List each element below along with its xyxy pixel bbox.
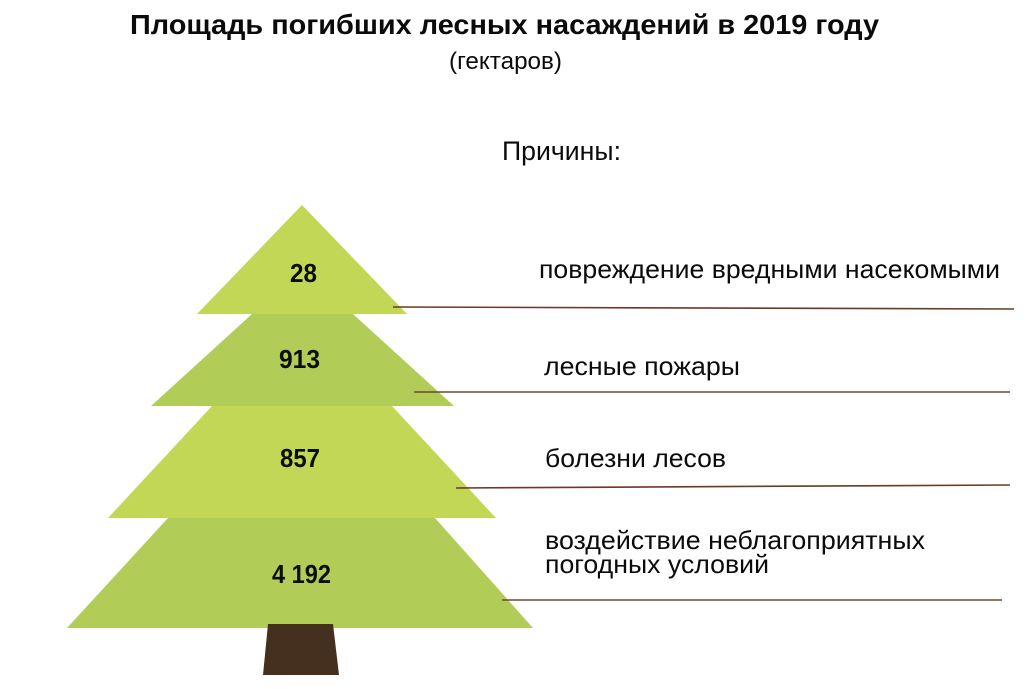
label: fires: лесные пожары bbox=[544, 351, 740, 381]
leader line: weather bbox=[502, 599, 1002, 601]
value: fires: 913 bbox=[279, 344, 320, 374]
tree tier 3 bbox=[108, 406, 496, 518]
title: Площадь погибших лесных насаждений в 2019 году bbox=[130, 9, 879, 40]
heading: causes: Причины: bbox=[502, 136, 621, 166]
label: weather: погодных условий bbox=[545, 549, 769, 579]
label: weather: воздействие неблагоприятных bbox=[545, 525, 925, 555]
value: diseases: 857 bbox=[280, 443, 320, 473]
tree tier 2 bbox=[151, 314, 454, 406]
tree tier 4 bbox=[67, 518, 533, 628]
leader line: diseases bbox=[456, 485, 1010, 488]
label: diseases: болезни лесов bbox=[545, 443, 726, 473]
leader line: fires bbox=[414, 391, 1010, 393]
tree tier 1 bbox=[197, 205, 407, 314]
tree trunk bbox=[263, 624, 339, 675]
leader line: insects bbox=[393, 307, 1014, 309]
icon: fir tree bbox=[67, 205, 533, 675]
label: weather bbox=[545, 525, 925, 579]
value: insects: 28 bbox=[290, 258, 317, 288]
subtitle: units: (гектаров) bbox=[449, 48, 562, 75]
label: insects: повреждение вредными насекомыми bbox=[539, 254, 1000, 284]
value: weather: 4 192 bbox=[272, 559, 331, 589]
